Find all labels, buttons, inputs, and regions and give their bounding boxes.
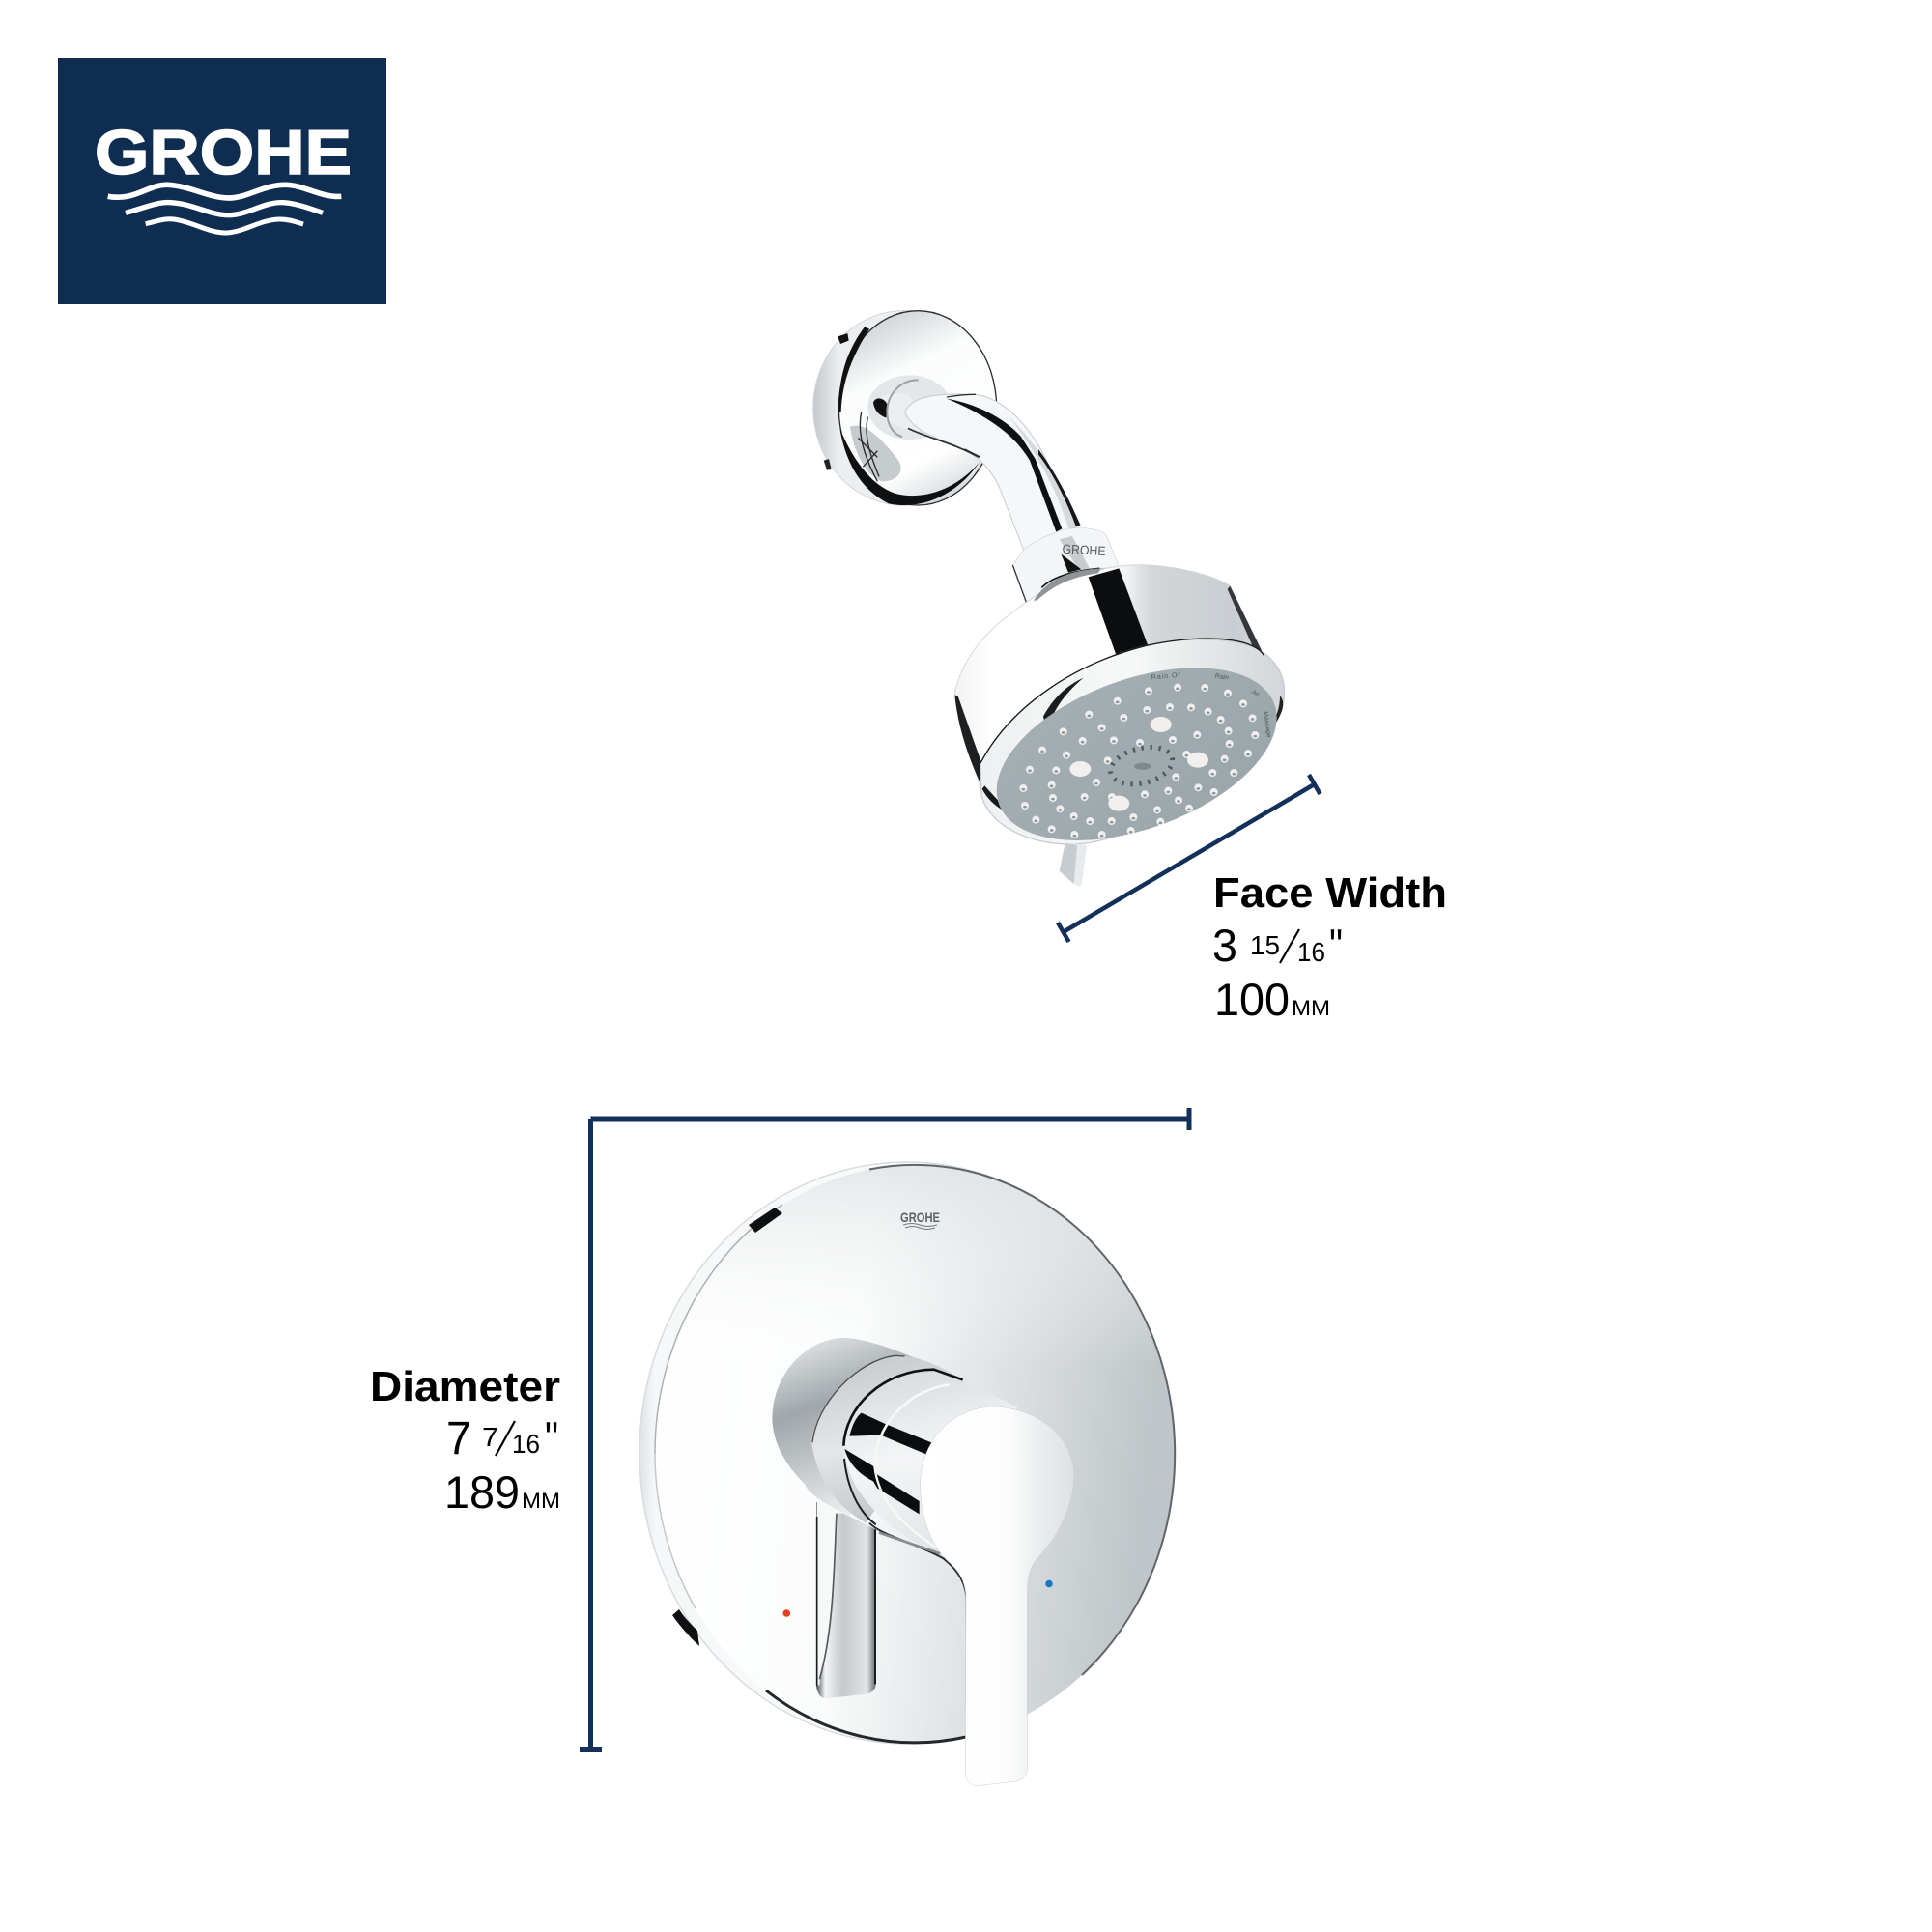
product: round valve trim plate: [639, 1162, 1175, 1786]
logo waves: [108, 185, 341, 233]
label: face width: 15: [1250, 930, 1280, 960]
wall flange: [813, 310, 997, 505]
label: face width: ": [1329, 920, 1343, 971]
selector tab: [1060, 843, 1087, 886]
center massage slots: [1107, 741, 1177, 790]
plate edge lines: [655, 1165, 1175, 1743]
handle cylinder: middle segment: [811, 1355, 963, 1523]
plate top shading: [655, 1165, 1175, 1743]
arm collar with logo: [1012, 528, 1123, 604]
temperature markers: [782, 1580, 1053, 1617]
plate face: [655, 1165, 1175, 1743]
mode labels: Rain O²: [1151, 672, 1181, 681]
handle cylinder: chrome segment: [843, 1369, 1017, 1555]
dimension line: face width: [1058, 775, 1320, 942]
spray face: [974, 634, 1300, 874]
handle cylinder: back segment: [772, 1338, 924, 1517]
label: face width: 16: [1297, 937, 1325, 967]
curved shower arm: [873, 380, 1080, 551]
label: face width: 100: [1214, 974, 1290, 1025]
label: diameter: 7: [482, 1422, 498, 1452]
label: face width: MM: [1292, 996, 1330, 1020]
chrome black reflections: [844, 1413, 935, 1514]
mode labels: [1151, 672, 1271, 739]
label: diameter: 189: [444, 1466, 520, 1518]
logo: GROHE brand panel: [58, 58, 386, 304]
label: diameter: 7: [446, 1413, 471, 1464]
back lever: [816, 1502, 876, 1698]
arm collar with logo: GROHE: [1062, 542, 1106, 558]
front ring: [980, 639, 1284, 844]
logo wordmark: GROHE: [95, 117, 352, 187]
label: diameter: 16: [512, 1429, 540, 1459]
label: face width: [1212, 869, 1447, 1025]
label: diameter: MM: [522, 1489, 560, 1513]
label: diameter: Diameter: [370, 1363, 560, 1410]
dimension bracket: diameter: [580, 1108, 1189, 1750]
plate logo: GROHE: [900, 1209, 940, 1225]
label: diameter: ": [545, 1412, 558, 1463]
head body: [954, 565, 1285, 809]
main lever handle: [921, 1406, 1074, 1786]
lever underside shadow: [869, 1523, 967, 1708]
product: shower arm and flange: [813, 310, 1123, 604]
label: face width: Face Width: [1213, 869, 1447, 917]
product: shower head: [954, 565, 1300, 886]
cylinder seam lines: [812, 1355, 963, 1553]
label: face width: 3: [1212, 920, 1237, 971]
plate rim: [639, 1162, 1175, 1744]
rim dark reflections: [672, 1208, 782, 1646]
mode labels: Rain: [1214, 673, 1229, 682]
mode labels: Jet: [1249, 689, 1260, 698]
plate logo: [900, 1209, 940, 1229]
mode labels: Massage: [1262, 711, 1271, 739]
label: diameter: [370, 1363, 560, 1518]
spray nozzles: [1019, 684, 1259, 838]
